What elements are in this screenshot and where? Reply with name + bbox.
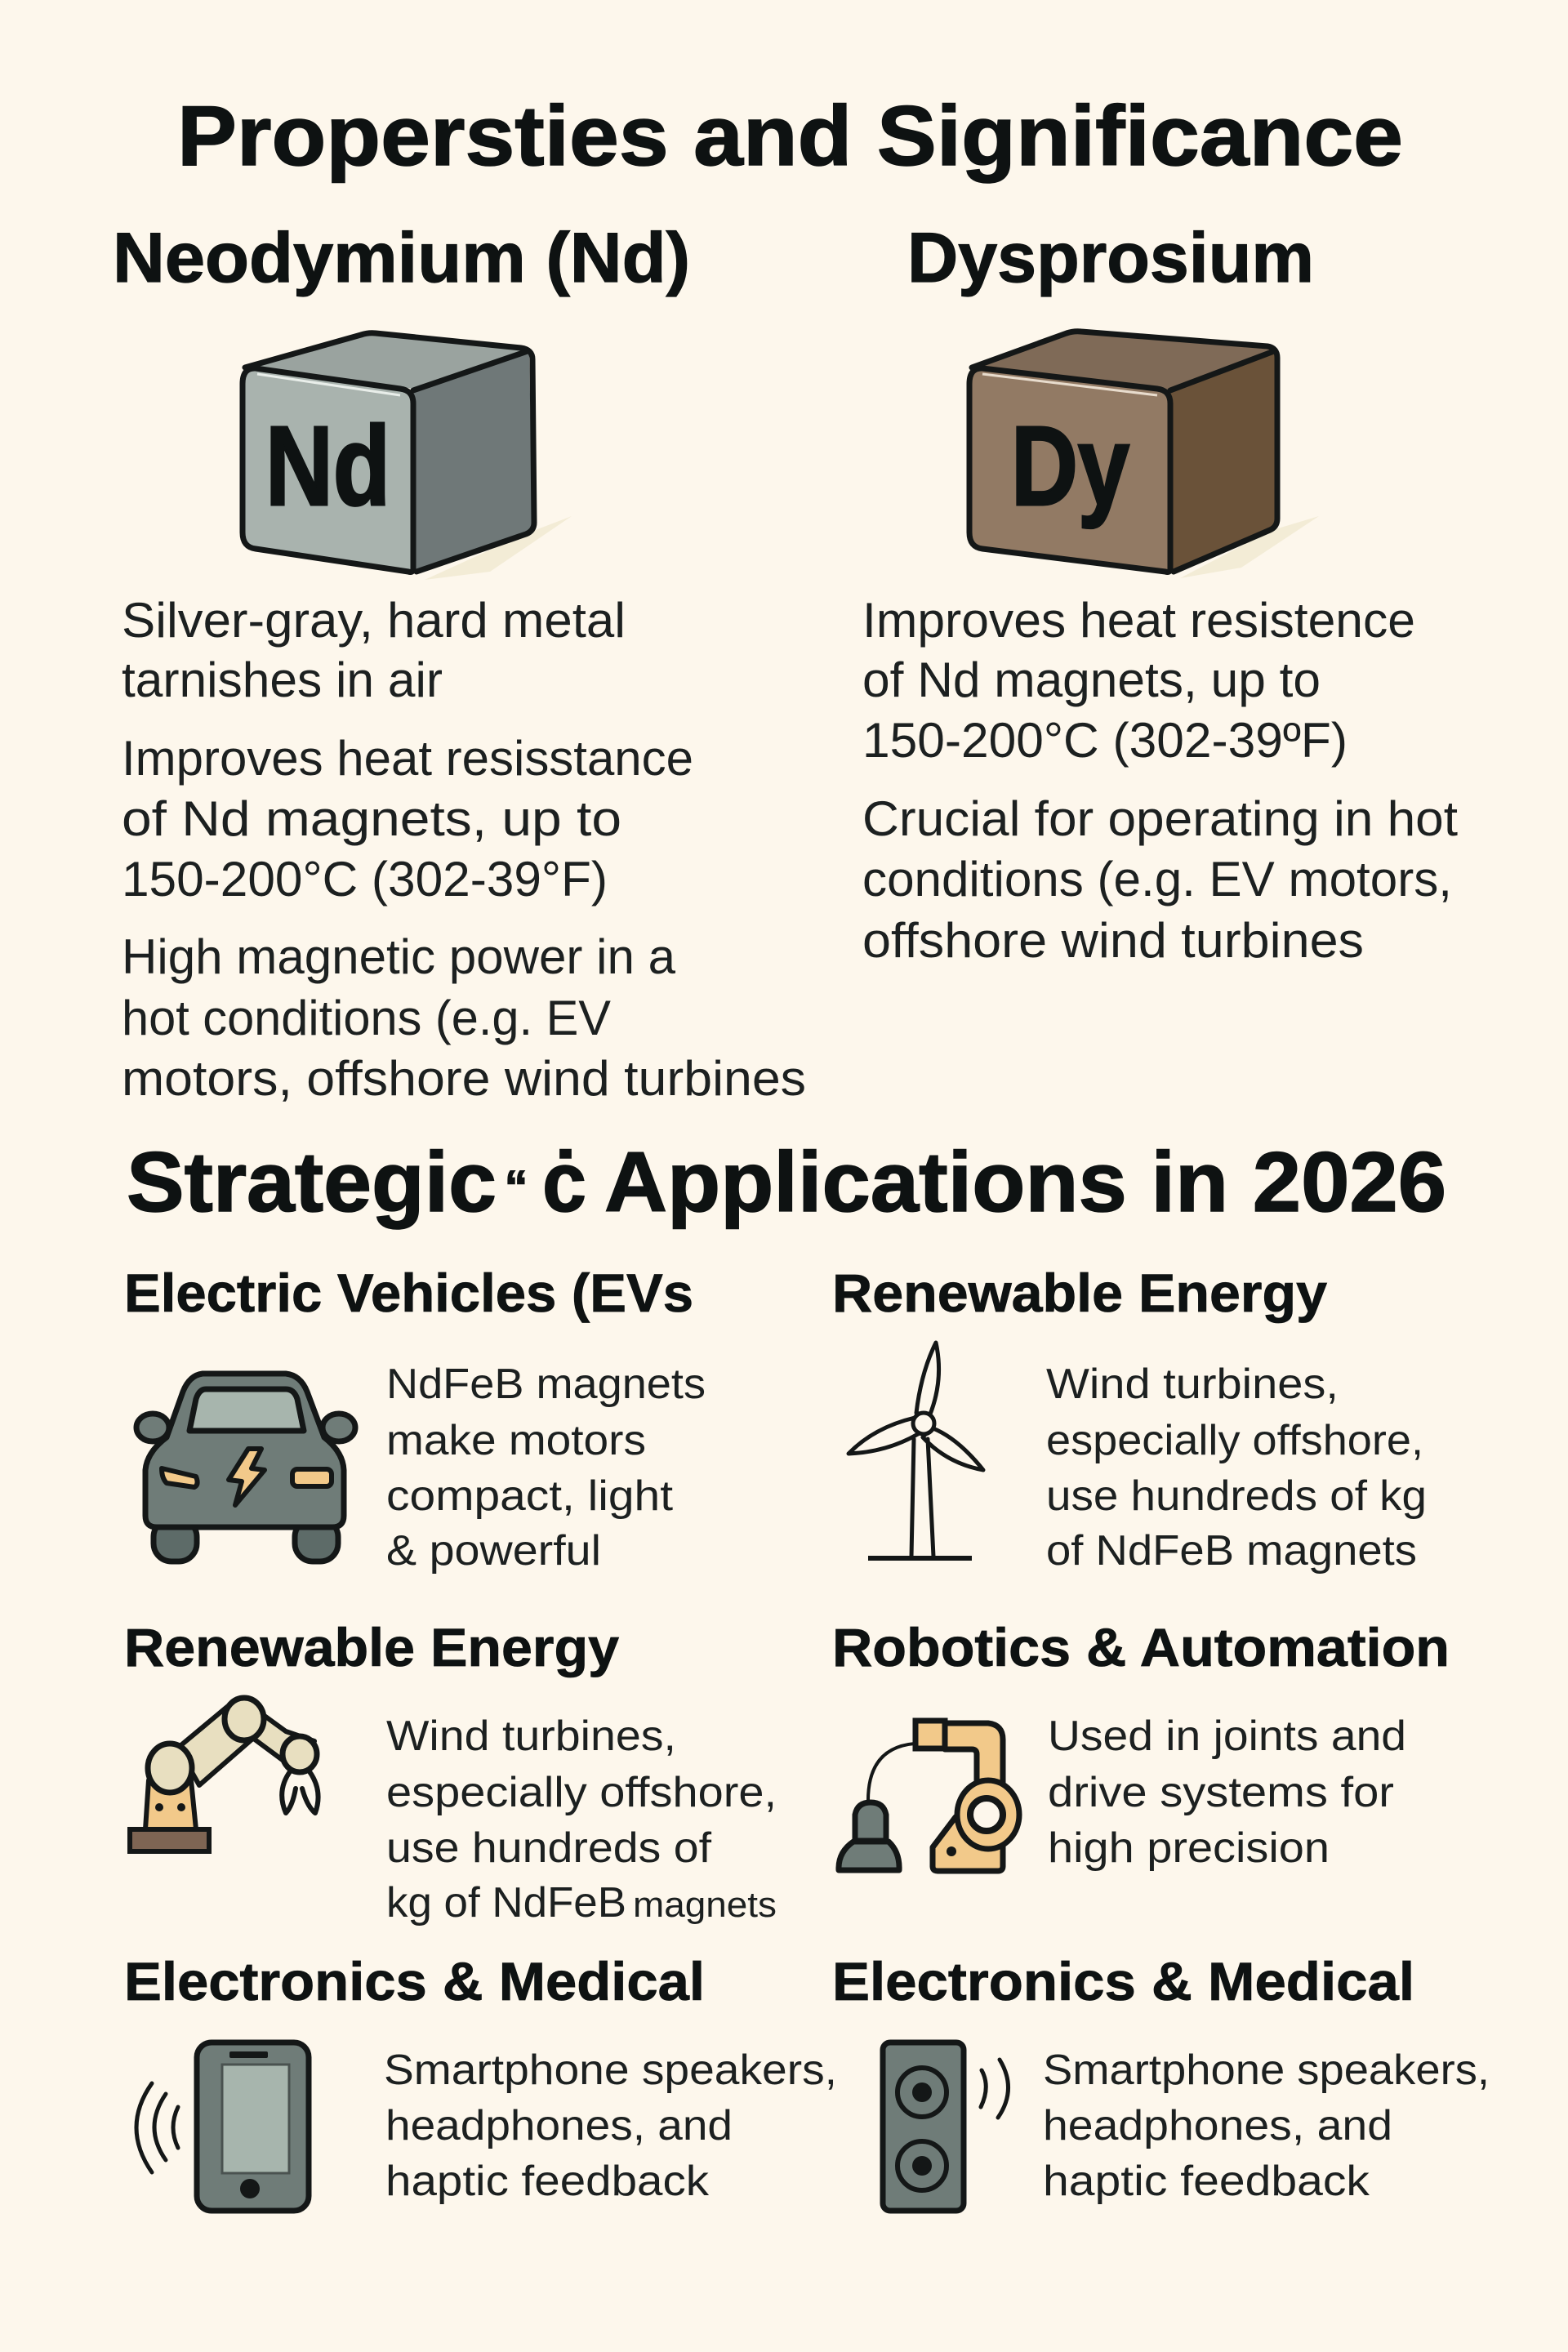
text block: electric vehicles: & powerful [386,1527,601,1575]
heading: electronics and medical: Electronics & Medical [124,1951,705,2011]
text block: neodymium properties: 150-200°C (302-39°F) [122,852,608,906]
text block: electric vehicles: compact, light [386,1472,674,1520]
heading: electronics and medical: Electronics & Medical [832,1951,1414,2011]
text block: neodymium properties: High magnetic power in a [122,929,676,984]
panel: electric vehicles [124,1263,706,1575]
text block: wind turbines: use hundreds of [386,1824,712,1872]
panel: electronics and medical (speaker) [832,1951,1490,2211]
text block: dysprosium properties: 150-200°C (302-39ºF) [862,713,1348,768]
section heading: strategic applications: Applications in 2026 [604,1135,1446,1230]
text block: smartphone speakers: haptic feedback [385,2158,710,2205]
icon: robot arm [130,1698,318,1851]
text block: electric vehicles [386,1361,706,1575]
icon: neodymium cube: Nd [265,403,390,529]
panel: renewable energy (robot arm) [124,1617,777,1927]
text block: wind turbines: especially offshore, [386,1769,777,1816]
text block: neodymium properties [122,593,806,1106]
heading: renewable energy: Renewable Energy [832,1263,1327,1323]
text block: joints and drive systems: Used in joints and [1048,1713,1406,1760]
text block: electric vehicles: make motors [386,1417,646,1464]
section heading: strategic applications: ċ [542,1135,586,1230]
section heading: strategic applications [127,1135,1446,1230]
text block: dysprosium properties: conditions (e.g. EV motors, [862,852,1452,906]
text block: smartphone speakers: haptic feedback [1043,2158,1370,2205]
text block: neodymium properties: of Nd magnets, up to [122,791,621,846]
section heading: strategic applications: “ [505,1160,528,1212]
text block: wind turbines: Wind turbines, [1046,1361,1339,1408]
title: Propersties and Significance [177,89,1403,184]
text block: smartphone speakers: Smartphone speakers, [384,2047,837,2094]
text block: wind turbines [386,1713,777,1927]
heading: dysprosium: Dysprosium [907,219,1314,297]
text block: dysprosium properties: Improves heat resistence [862,593,1415,648]
panel: neodymium [113,219,806,1106]
text block: smartphone speakers: headphones, and [385,2102,733,2149]
heading: robotics and automation: Robotics & Automation [832,1617,1450,1677]
text block: neodymium properties: hot conditions (e.g. EV [122,991,611,1045]
text block: wind turbines: magnets [633,1885,777,1925]
panel: electronics and medical (phone) [124,1951,837,2211]
text block: wind turbines: use hundreds of kg [1046,1472,1427,1520]
heading: electric vehicles: Electric Vehicles (EVs [124,1263,693,1323]
icon: electric car [136,1374,355,1561]
text block: wind turbines: kg of NdFeB [386,1879,626,1927]
text block: joints and drive systems: high precision [1048,1824,1330,1872]
icon: wind turbine [849,1343,983,1558]
text block: neodymium properties: Improves heat resisstance [122,731,693,786]
text block: joints and drive systems: drive systems for [1048,1769,1394,1816]
text block: electric vehicles: NdFeB magnets [386,1361,706,1408]
text block: wind turbines: especially offshore, [1046,1417,1423,1464]
text block: smartphone speakers: Smartphone speakers, [1043,2047,1490,2094]
text block: dysprosium properties: offshore wind turbines [862,913,1364,968]
section heading: strategic applications: Strategic [127,1135,497,1230]
icon: smartphone [136,2042,309,2211]
icon: neodymium cube [243,333,572,580]
icon: loudspeaker [883,2042,1009,2211]
text block: dysprosium properties [862,593,1458,968]
text block: wind turbines: Wind turbines, [386,1713,676,1760]
icon: dysprosium cube [969,332,1319,578]
text block: dysprosium properties: of Nd magnets, up to [862,653,1321,707]
text block: wind turbines [1046,1361,1427,1575]
text block: joints and drive systems [1048,1713,1406,1872]
panel: dysprosium [862,219,1458,968]
heading: renewable energy: Renewable Energy [124,1617,619,1677]
text block: smartphone speakers: headphones, and [1043,2102,1392,2149]
text block: neodymium properties: tarnishes in air [122,653,443,707]
panel: renewable energy (wind) [832,1263,1427,1575]
icon: servo motor [839,1721,1019,1871]
text block: smartphone speakers [384,2047,837,2205]
icon: dysprosium cube: Dy [1011,403,1129,529]
text block: wind turbines: of NdFeB magnets [1046,1527,1417,1575]
text block: neodymium properties: motors, offshore wind turbines [122,1051,806,1106]
text block: smartphone speakers [1043,2047,1490,2205]
panel: robotics and automation [832,1617,1450,1872]
heading: neodymium: Neodymium (Nd) [113,219,690,297]
text block: neodymium properties: Silver-gray, hard metal [122,593,626,648]
text block: dysprosium properties: Crucial for operating in hot [862,791,1458,846]
